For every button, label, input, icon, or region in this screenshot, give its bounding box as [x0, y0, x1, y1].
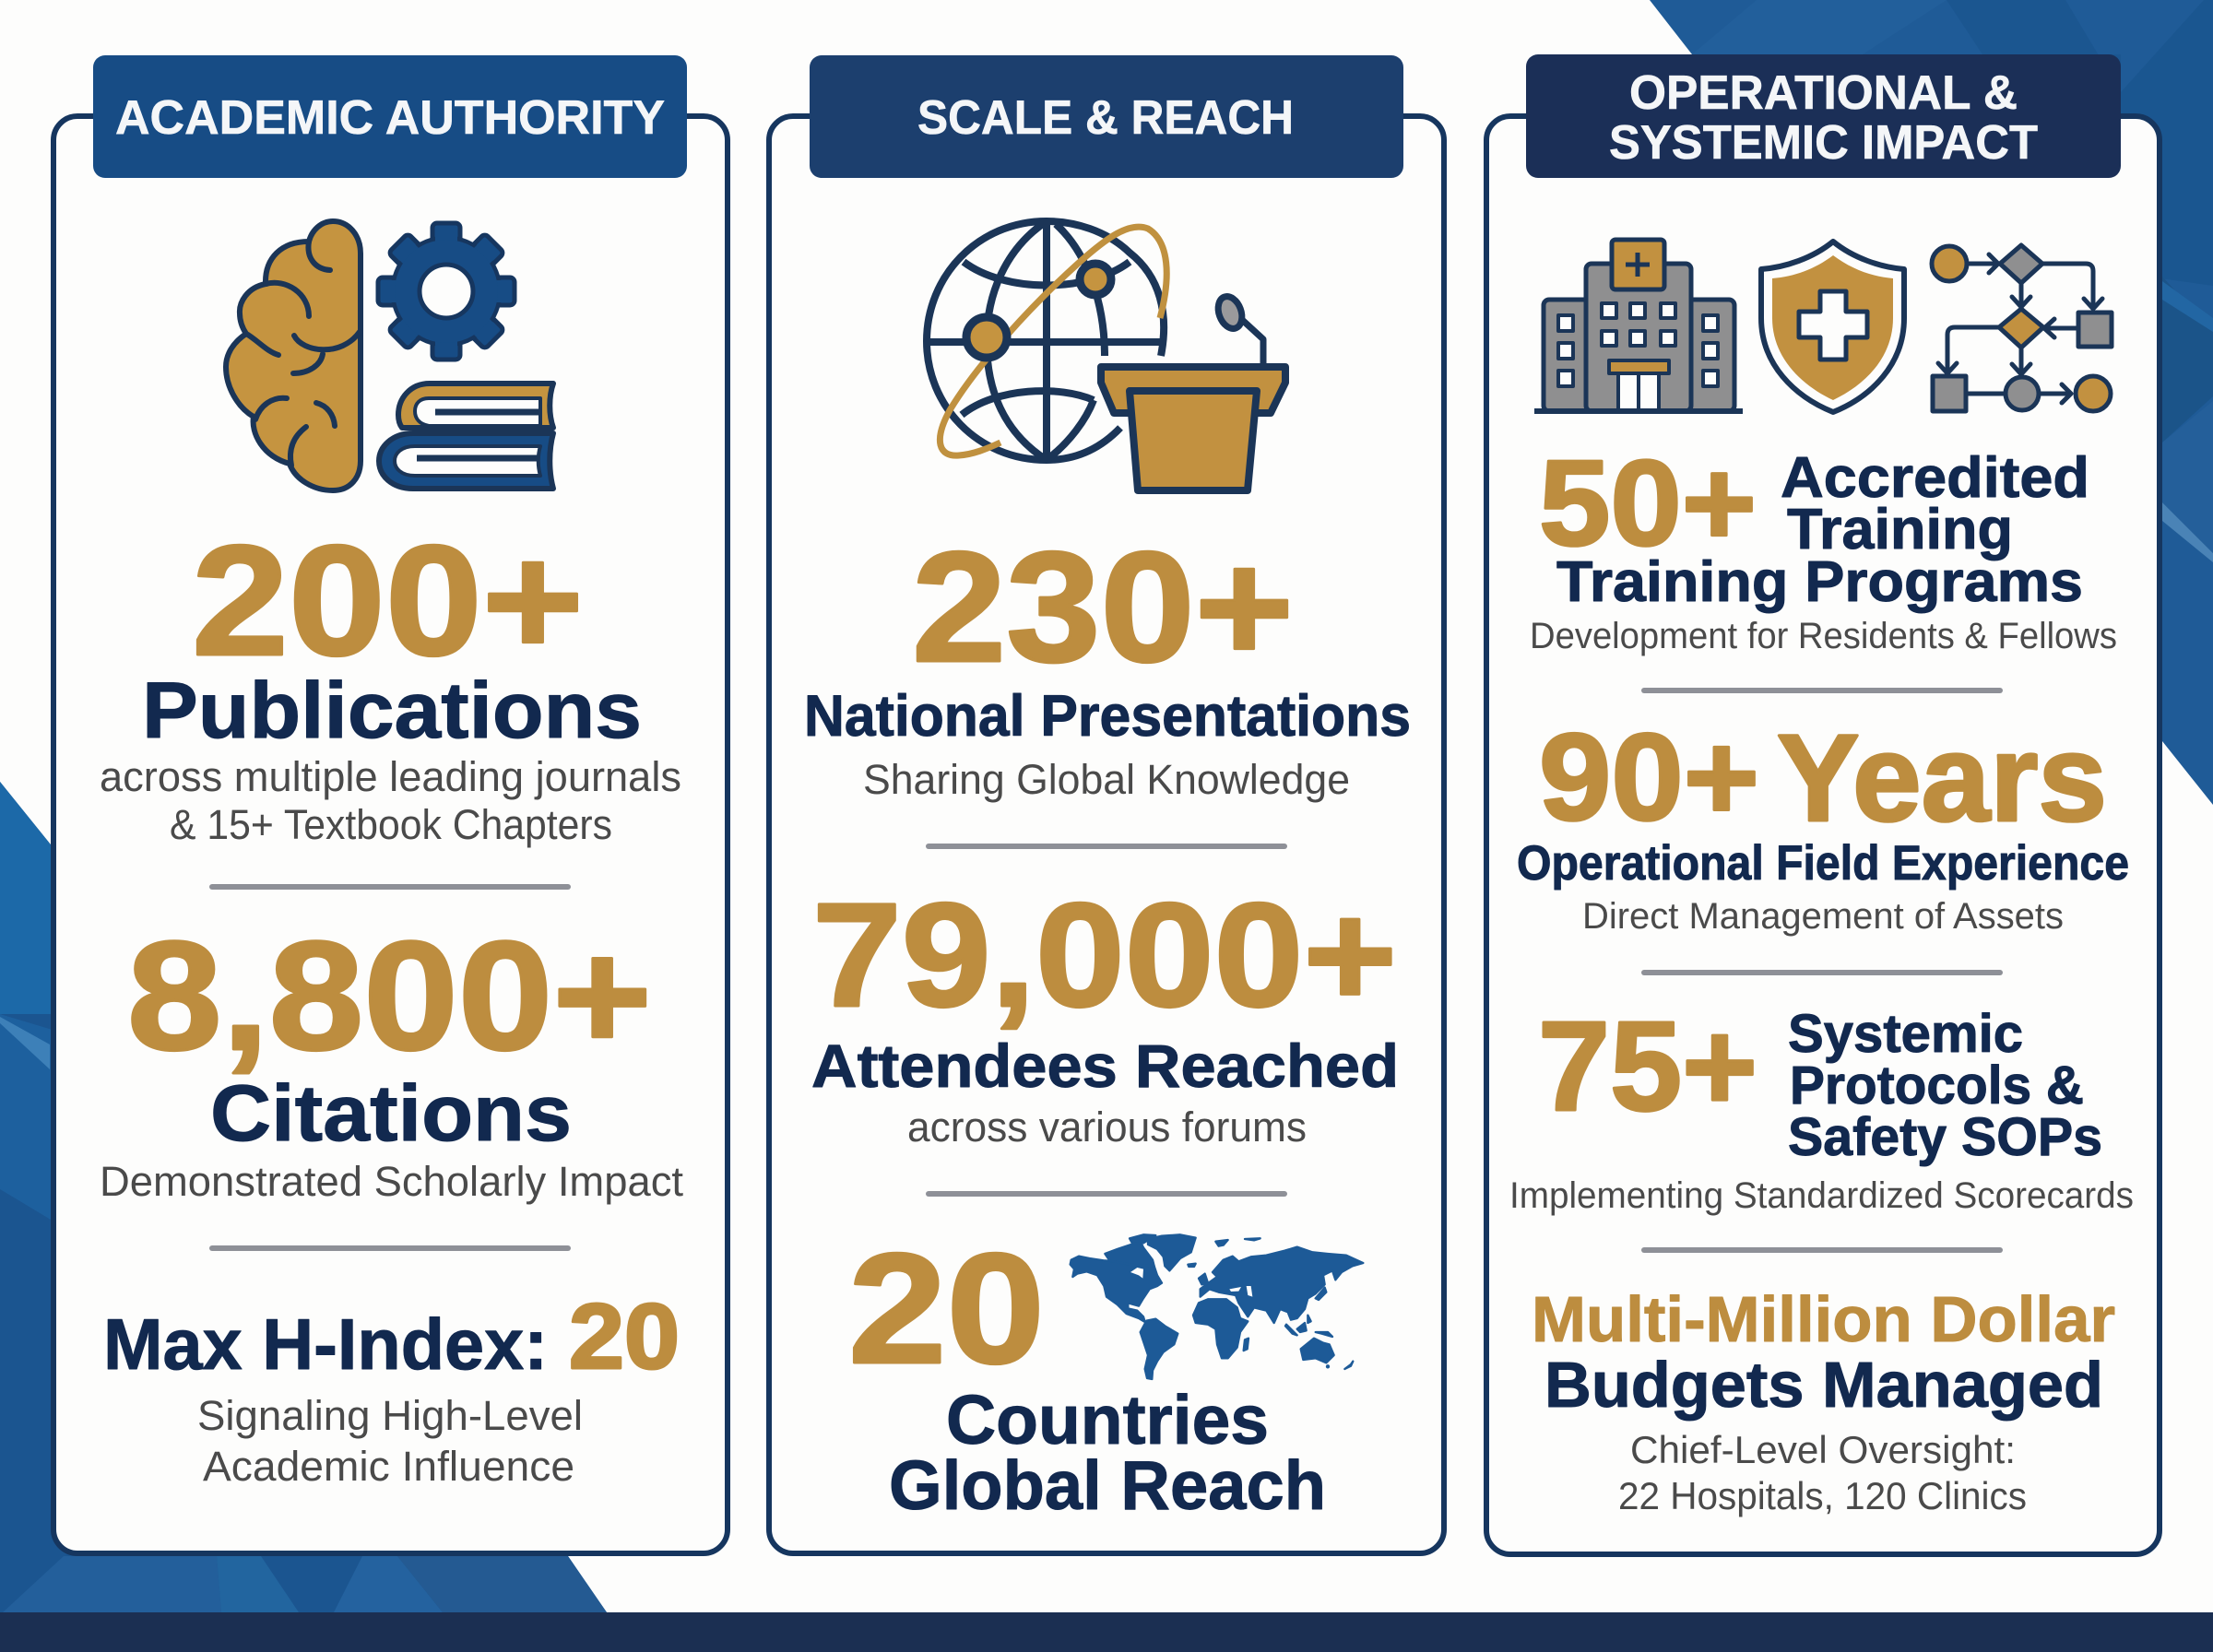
- icon: network nodes: [966, 264, 1111, 358]
- stat: 200+ publications: [100, 513, 681, 848]
- stat: 79,000+ attendees: [811, 872, 1399, 1150]
- stat: 90+ years: 90+: [1539, 709, 1759, 846]
- stat: 79,000+ attendees: Attendees Reached: [811, 1032, 1399, 1100]
- stat: 8,800+ citations: Citations: [210, 1069, 572, 1158]
- stat: 8,800+ citations: [100, 909, 683, 1205]
- stat: 200+ publications: & 15+ Textbook Chapters: [170, 801, 612, 848]
- stat: multi-million dollar budgets: Chief-Level Oversight:: [1630, 1428, 2016, 1471]
- stat: 200+ publications: 200+: [192, 513, 584, 689]
- icon: globe: [927, 221, 1164, 460]
- icon: gold orbit ring: [940, 227, 1166, 455]
- stat: max h-index: 20: [569, 1285, 680, 1388]
- stat: 90+ years: [1517, 709, 2129, 937]
- stat: 90+ years: Direct Management of Assets: [1582, 896, 2064, 937]
- icon: brain: [226, 221, 361, 490]
- icon: hospital: [1534, 240, 1743, 411]
- icon: shield with cross: [1761, 242, 1904, 412]
- stat: 50+ accredited training programs: Training: [1787, 498, 2013, 561]
- stat: 50+ accredited training programs: [1530, 435, 2117, 656]
- stat: 50+ accredited training programs: Development for Residents & Fellows: [1530, 616, 2117, 656]
- stat: max h-index: Signaling High-Level: [197, 1392, 583, 1439]
- heading: academic authority: ACADEMIC AUTHORITY: [115, 91, 665, 145]
- stat: 75+ systemic protocols: 75+: [1538, 996, 1757, 1138]
- stat: 230+ national presentations: National Presentations: [804, 684, 1411, 749]
- panel: academic authority: [53, 55, 728, 1553]
- icon: world map: [1071, 1234, 1363, 1379]
- icon: brain, gear and books: [226, 221, 553, 490]
- stat: 20 countries: 20: [848, 1221, 1045, 1397]
- stat: multi-million dollar budgets: Budgets Managed: [1544, 1349, 2103, 1421]
- stat: 20 countries: [848, 1221, 1363, 1524]
- footer band: [0, 1612, 2213, 1652]
- stat: 8,800+ citations: Demonstrated Scholarly Impact: [100, 1158, 683, 1205]
- heading: academic authority: [93, 55, 687, 178]
- stat: 90+ years: Operational Field Experience: [1517, 836, 2129, 891]
- heading: operational and systemic impact: OPERATIONAL &: [1629, 66, 2018, 120]
- heading: operational and systemic impact: SYSTEMIC IMPACT: [1609, 116, 2038, 170]
- icon: stacked books: [379, 384, 553, 489]
- stat: 90+ years: Years: [1777, 710, 2107, 847]
- stat: 75+ systemic protocols: Implementing Standardized Scorecards: [1509, 1175, 2134, 1216]
- panel: scale and reach: [769, 55, 1444, 1553]
- stat: multi-million dollar budgets: Multi-Million Dollar: [1532, 1283, 2115, 1355]
- stat: 200+ publications: across multiple leading journals: [100, 753, 681, 800]
- icon: gear: [378, 223, 515, 360]
- stat: 230+ national presentations: [804, 520, 1411, 803]
- stat: 50+ accredited training programs: Training Programs: [1556, 550, 2083, 614]
- stat: max h-index: Max H-Index:: [103, 1304, 548, 1385]
- stat: 79,000+ attendees: 79,000+: [812, 872, 1397, 1037]
- stat: 75+ systemic protocols: Safety SOPs: [1788, 1107, 2102, 1167]
- stat: 75+ systemic protocols: Systemic: [1788, 1004, 2023, 1064]
- heading: operational and systemic impact: [1526, 54, 2121, 178]
- stat: 75+ systemic protocols: [1509, 996, 2134, 1216]
- panel: operational and systemic impact: [1486, 54, 2160, 1554]
- icon: globe and podium: [927, 221, 1285, 490]
- stat: 230+ national presentations: 230+: [912, 520, 1294, 695]
- icon: process flowchart: [1932, 245, 2112, 411]
- stat: max h-index: Academic Influence: [203, 1443, 574, 1490]
- stat: multi-million dollar budgets: 22 Hospitals, 120 Clinics: [1618, 1474, 2027, 1517]
- stat: 79,000+ attendees: across various forums: [907, 1103, 1307, 1150]
- stat: 230+ national presentations: Sharing Global Knowledge: [863, 756, 1350, 803]
- stat: max h-index: [103, 1285, 680, 1490]
- background: top right blue facets: [1650, 0, 2213, 805]
- background: left and bottom blue facets: [0, 782, 607, 1612]
- icon: podium: [1101, 293, 1285, 490]
- stat: 50+ accredited training programs: 50+: [1539, 435, 1757, 571]
- stat: 20 countries: Global Reach: [889, 1446, 1326, 1524]
- stat: 20 countries: Countries: [946, 1381, 1269, 1458]
- stat: 75+ systemic protocols: Protocols &: [1790, 1056, 2084, 1115]
- stat: multi-million dollar budgets: [1532, 1283, 2115, 1517]
- stat: 50+ accredited training programs: Accredited: [1781, 446, 2089, 510]
- heading: scale and reach: [810, 55, 1403, 178]
- stat: 8,800+ citations: 8,800+: [127, 909, 652, 1082]
- heading: scale and reach: SCALE & REACH: [917, 91, 1294, 145]
- stat: 200+ publications: Publications: [142, 667, 642, 755]
